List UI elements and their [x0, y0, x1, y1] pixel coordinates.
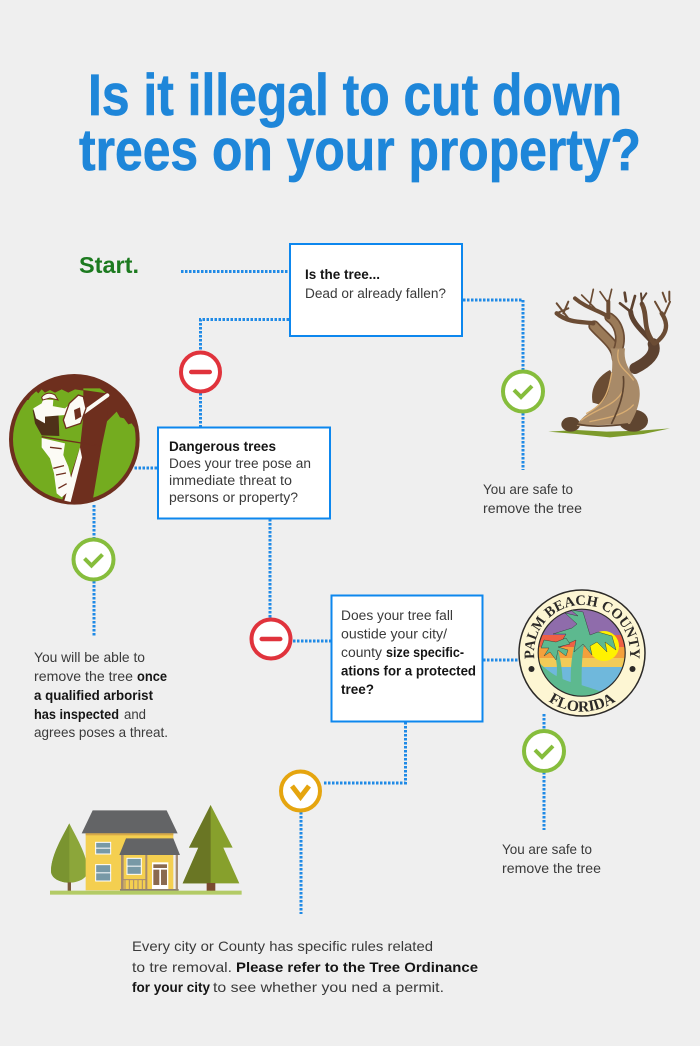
connector lines [94, 272, 544, 914]
icon: dead tree [548, 289, 670, 437]
text: safe to remove, right: remove the tree [483, 500, 582, 516]
panel: dangerous trees: Does your tree pose an [169, 456, 311, 471]
text: safe to remove, right [483, 481, 582, 516]
text: arborist outcome: agrees poses a threat. [34, 724, 168, 740]
text: tree ordinance note: to see whether you ned a permit. [213, 979, 444, 995]
panel: size specifications: size specific- [386, 645, 464, 660]
panel: dangerous trees: persons or property? [169, 490, 298, 505]
icon: check right [503, 372, 543, 412]
text: arborist outcome [34, 649, 168, 740]
panel: size specifications [332, 596, 482, 722]
icon: minus top [181, 352, 220, 392]
text: arborist outcome: a qualified arborist [34, 687, 153, 703]
panel: dangerous trees: Dangerous trees [169, 439, 276, 454]
panel: is the tree dead [290, 244, 462, 336]
panel: size specifications: ations for a protected [341, 664, 476, 678]
title: Is it illegal to cut down [88, 63, 622, 128]
icon: palm beach county seal: PALM BEACH COUNTY [524, 595, 640, 659]
icon: arborist badge [9, 367, 143, 507]
panel: is the tree dead: Is the tree... [305, 267, 380, 282]
panel: dangerous trees: immediate threat to [169, 473, 292, 488]
text: arborist outcome: and [124, 706, 146, 722]
panel: size specifications: oustide your city/ [341, 626, 447, 642]
icon: check seal [524, 731, 564, 771]
text: tree ordinance note: to tre removal. [132, 959, 232, 975]
text: tree ordinance note: Every city or County has specific rules related [132, 938, 433, 954]
text: tree ordinance note [132, 938, 478, 995]
text: safe to remove, lower right: remove the tree [502, 860, 601, 876]
icon: yellow v [281, 772, 320, 810]
start label: Start. [79, 252, 139, 278]
icon: check left [74, 540, 114, 580]
text: safe to remove, lower right [502, 841, 601, 876]
icon: house with trees [50, 805, 242, 895]
icon: minus middle [252, 620, 290, 658]
panel: size specifications: tree? [341, 682, 374, 697]
panel: is the tree dead: Dead or already fallen? [305, 286, 446, 301]
text: arborist outcome: remove the tree [34, 668, 133, 684]
panel: size specifications: county [341, 645, 382, 660]
panel: size specifications: Does your tree fall [341, 608, 453, 623]
icon: palm beach county seal [518, 589, 646, 717]
text: tree ordinance note: Please refer to the Tree Ordinance [236, 959, 478, 975]
text: arborist outcome: once [137, 668, 167, 684]
panel: dangerous trees [158, 428, 330, 518]
icon: palm beach county seal: FLORIDA [548, 692, 616, 712]
text: safe to remove, lower right: You are safe to [502, 841, 592, 857]
text: arborist outcome: has inspected [34, 706, 119, 722]
text: tree ordinance note: for your city [132, 979, 210, 995]
title [79, 63, 641, 183]
text: safe to remove, right: You are safe to [483, 481, 573, 497]
text: arborist outcome: You will be able to [34, 649, 145, 665]
